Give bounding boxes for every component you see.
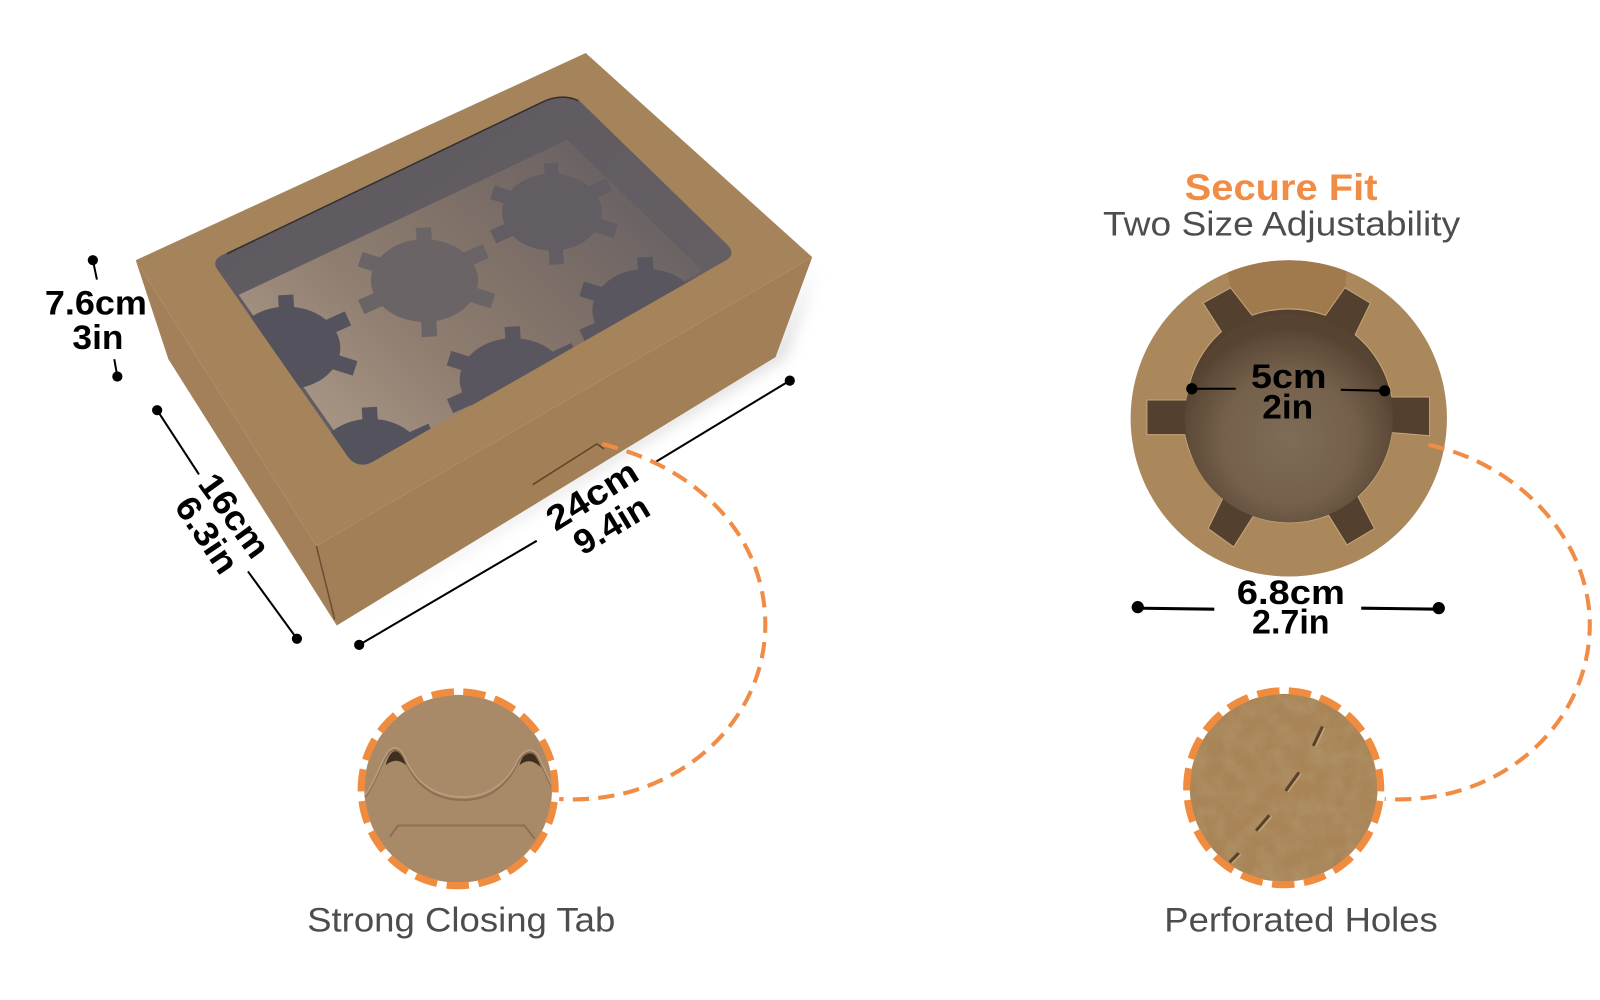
- dimension: inner diameter: 2in: [1262, 388, 1313, 426]
- closing tab slot: [533, 444, 604, 485]
- dimension: box width: [152, 405, 302, 644]
- dimension: box height: 7.6cm: [45, 284, 147, 322]
- label: strong closing tab: Strong Closing Tab: [307, 902, 615, 940]
- flap shadow edge: [365, 750, 553, 800]
- dimension: outer diameter: [1132, 574, 1445, 642]
- cupcake holes seen through window: [492, 163, 616, 264]
- insert photo: cupcake holder hole: [1131, 255, 1447, 577]
- dimension: box height: 3in: [72, 319, 123, 357]
- dimension: outer diameter: 6.8cm: [1237, 574, 1345, 612]
- dimension: box height: [45, 255, 147, 382]
- perforation slits: [1232, 728, 1324, 863]
- flap shadow notches: [386, 751, 541, 767]
- dimension: box length: 24cm: [540, 453, 645, 539]
- dimension: outer diameter: 2.7in: [1252, 604, 1330, 642]
- orange dashed ring: [356, 687, 560, 891]
- front seam: [316, 546, 335, 619]
- dimension: inner diameter: 5cm: [1251, 358, 1327, 396]
- dimension: inner diameter: [1186, 358, 1390, 426]
- detail circle: strong closing tab: [356, 687, 560, 891]
- arrow: dashed curve from insert to perforated holes detail: [1385, 445, 1590, 799]
- lower crease: [390, 826, 535, 839]
- darker area between upper tabs: [1228, 260, 1347, 314]
- closing tab flap edge: [365, 748, 553, 797]
- detail circle: perforated holes: [1182, 686, 1386, 890]
- inner hole floor: [1185, 314, 1393, 522]
- subheading: two size adjustability: Two Size Adjustability: [1103, 206, 1461, 244]
- arrow: dashed curve from box tab to closing tab detail: [559, 444, 765, 799]
- dimension: box width: 6.3in: [167, 490, 246, 581]
- box lid top face: [136, 53, 812, 546]
- dimension: box length: 9.4in: [567, 488, 657, 563]
- orange dashed ring: [1182, 686, 1386, 890]
- heading: secure fit: Secure Fit: [1185, 167, 1378, 208]
- dimension: box length: [354, 376, 795, 650]
- perforation slit shadows: [1230, 727, 1322, 862]
- box window: [215, 96, 732, 465]
- label: perforated holes: Perforated Holes: [1164, 902, 1438, 940]
- six tab cutout: [1147, 288, 1430, 547]
- product photo: kraft cupcake box: [136, 53, 816, 626]
- box left side: [136, 260, 337, 626]
- box front side: [316, 257, 812, 626]
- dimension: box width: 16cm: [190, 466, 277, 566]
